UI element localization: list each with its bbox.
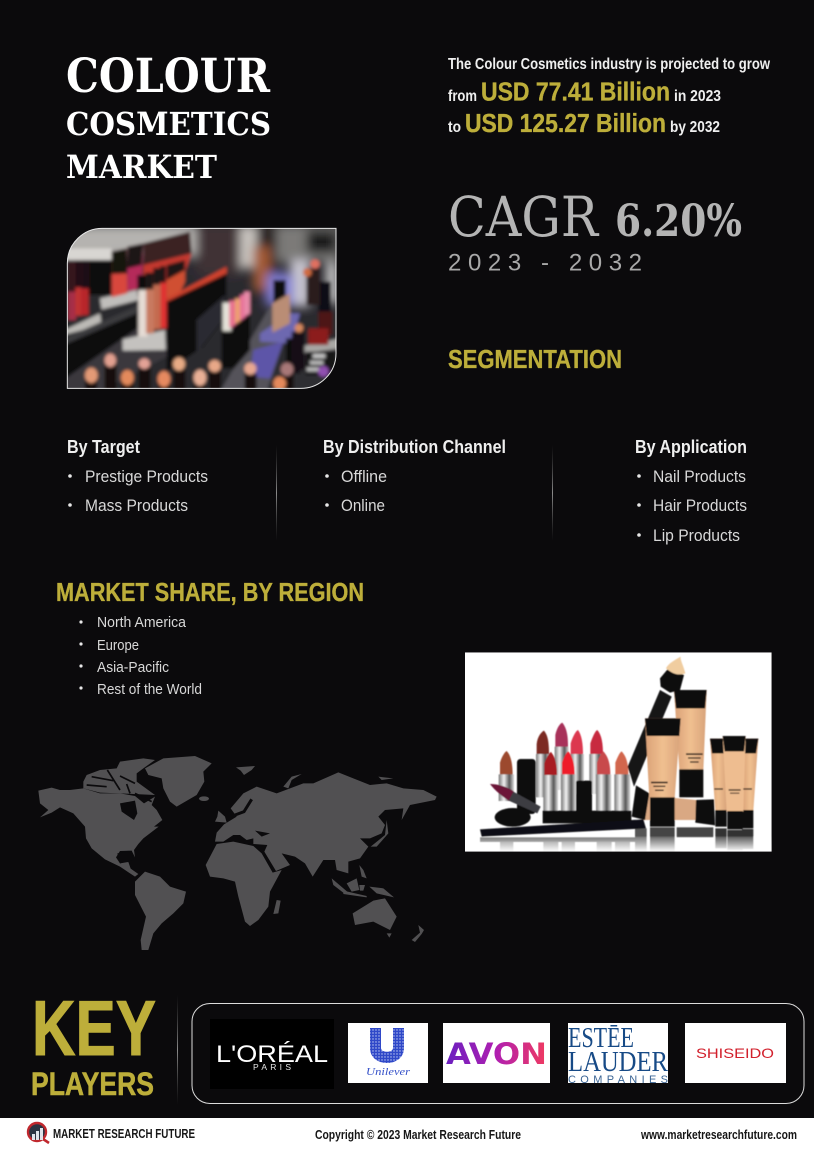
market size statement: in 2023 <box>674 88 721 105</box>
Japan <box>371 820 388 847</box>
region list <box>79 615 202 698</box>
Gulf of Mexico <box>117 851 133 863</box>
North America <box>38 788 162 877</box>
logo: Estee Lauder <box>568 1023 668 1086</box>
panel: key player logos <box>192 1004 804 1104</box>
Arctic channels <box>87 770 152 802</box>
long pencil <box>480 819 646 837</box>
logo: L'Oreal: L'ORÉAL <box>216 1041 328 1068</box>
logo: Estee Lauder: ESTĒE <box>568 1023 634 1054</box>
logo: Unilever: Unilever <box>366 1066 411 1078</box>
logo: Avon: AVON <box>446 1037 547 1071</box>
Madagascar <box>273 900 281 914</box>
footer <box>0 1118 814 1150</box>
front gloss row <box>138 277 148 337</box>
SE Asia islands <box>332 878 350 894</box>
segment: by target: Mass Products <box>85 497 188 515</box>
Greenland <box>145 756 212 807</box>
heading: market share by region: MARKET SHARE, BY REGION <box>56 577 364 607</box>
black cases <box>517 759 536 814</box>
Hudson Bay <box>120 801 137 820</box>
right items <box>273 280 286 303</box>
fallen lipstick <box>490 784 514 801</box>
segment: by target <box>67 436 208 515</box>
CAGR figure: 2023 - 2032 <box>448 250 642 276</box>
bullets front <box>84 365 294 388</box>
segment: by application: Hair Products <box>653 497 747 515</box>
tube labels <box>651 753 752 794</box>
market size statement: by 2032 <box>670 119 720 136</box>
region list: North America <box>97 615 187 631</box>
segment: by application: Lip Products <box>653 527 740 545</box>
icon: market research future logo <box>28 1123 49 1143</box>
segment: by distribution channel <box>323 436 506 515</box>
back lipsticks <box>537 731 549 755</box>
logo: Estee Lauder: COMPANIES <box>568 1074 668 1086</box>
title <box>66 49 271 186</box>
Australia <box>353 898 397 930</box>
region list: Rest of the World <box>97 682 202 698</box>
New Zealand <box>412 925 424 942</box>
South America <box>135 872 186 950</box>
logo: Shiseido: SHISEIDO <box>696 1045 774 1061</box>
logo: Unilever <box>348 1023 428 1083</box>
title: MARKET <box>66 148 217 186</box>
segment: by distribution channel: Offline <box>341 468 387 486</box>
logo: L'Oreal: PARIS <box>253 1062 291 1072</box>
heading: key players: KEY <box>32 984 156 1072</box>
CAGR figure: CAGR <box>448 185 599 249</box>
logo: Avon <box>443 1023 550 1083</box>
front lipsticks <box>500 751 513 775</box>
CAGR figure <box>448 185 742 276</box>
segment: by application: By Application <box>635 436 747 457</box>
photo: lipsticks and foundation tubes <box>465 652 772 852</box>
market size statement: USD 125.27 Billion <box>465 110 666 138</box>
Svalbard <box>236 766 255 775</box>
region list: Europe <box>97 638 139 654</box>
Arctic islands <box>83 758 155 795</box>
market size statement <box>448 56 771 138</box>
world map <box>38 756 437 950</box>
segment: by distribution channel: Online <box>341 497 385 515</box>
segment: by application <box>635 436 747 545</box>
segment: by target: Prestige Products <box>85 468 208 486</box>
title: COLOUR <box>66 49 271 104</box>
black lipstick row <box>167 268 227 372</box>
logo: Shiseido <box>685 1023 786 1083</box>
photo: cosmetics display shelves <box>60 223 343 393</box>
reflection <box>480 827 753 852</box>
heading: key players <box>31 984 156 1102</box>
foundation tubes <box>674 690 707 770</box>
Novaya Zemlya <box>283 774 302 788</box>
footer: Copyright © 2023 Market Research Future <box>315 1128 521 1142</box>
logo: L'Oreal <box>210 1019 334 1089</box>
segment: by application: Nail Products <box>653 468 746 486</box>
logo: Estee Lauder: LAUDER <box>568 1047 668 1078</box>
heading: segmentation: SEGMENTATION <box>448 344 622 374</box>
Africa <box>206 842 282 926</box>
Severnaya Zemlya <box>378 777 393 780</box>
region list: Asia-Pacific <box>97 660 169 676</box>
Eurasia <box>215 772 437 877</box>
segment: by target: By Target <box>67 436 140 457</box>
Black Sea <box>255 831 270 837</box>
Baltic <box>235 799 252 815</box>
market size statement: from <box>448 88 477 105</box>
back row gloss <box>68 289 79 323</box>
title: COSMETICS <box>66 105 271 143</box>
makeup brush <box>628 690 672 787</box>
CAGR figure: 6.20% <box>615 196 742 247</box>
Britain <box>215 811 227 823</box>
Iceland <box>199 796 209 801</box>
heading: key players: PLAYERS <box>31 1066 154 1102</box>
market size statement: USD 77.41 Billion <box>481 78 670 106</box>
shelves <box>68 314 137 377</box>
segment: by distribution channel: By Distribution Channel <box>323 436 506 457</box>
white and pink gloss cluster <box>222 330 232 368</box>
market size statement: to <box>448 119 461 136</box>
footer: MARKET RESEARCH FUTURE <box>53 1127 195 1141</box>
